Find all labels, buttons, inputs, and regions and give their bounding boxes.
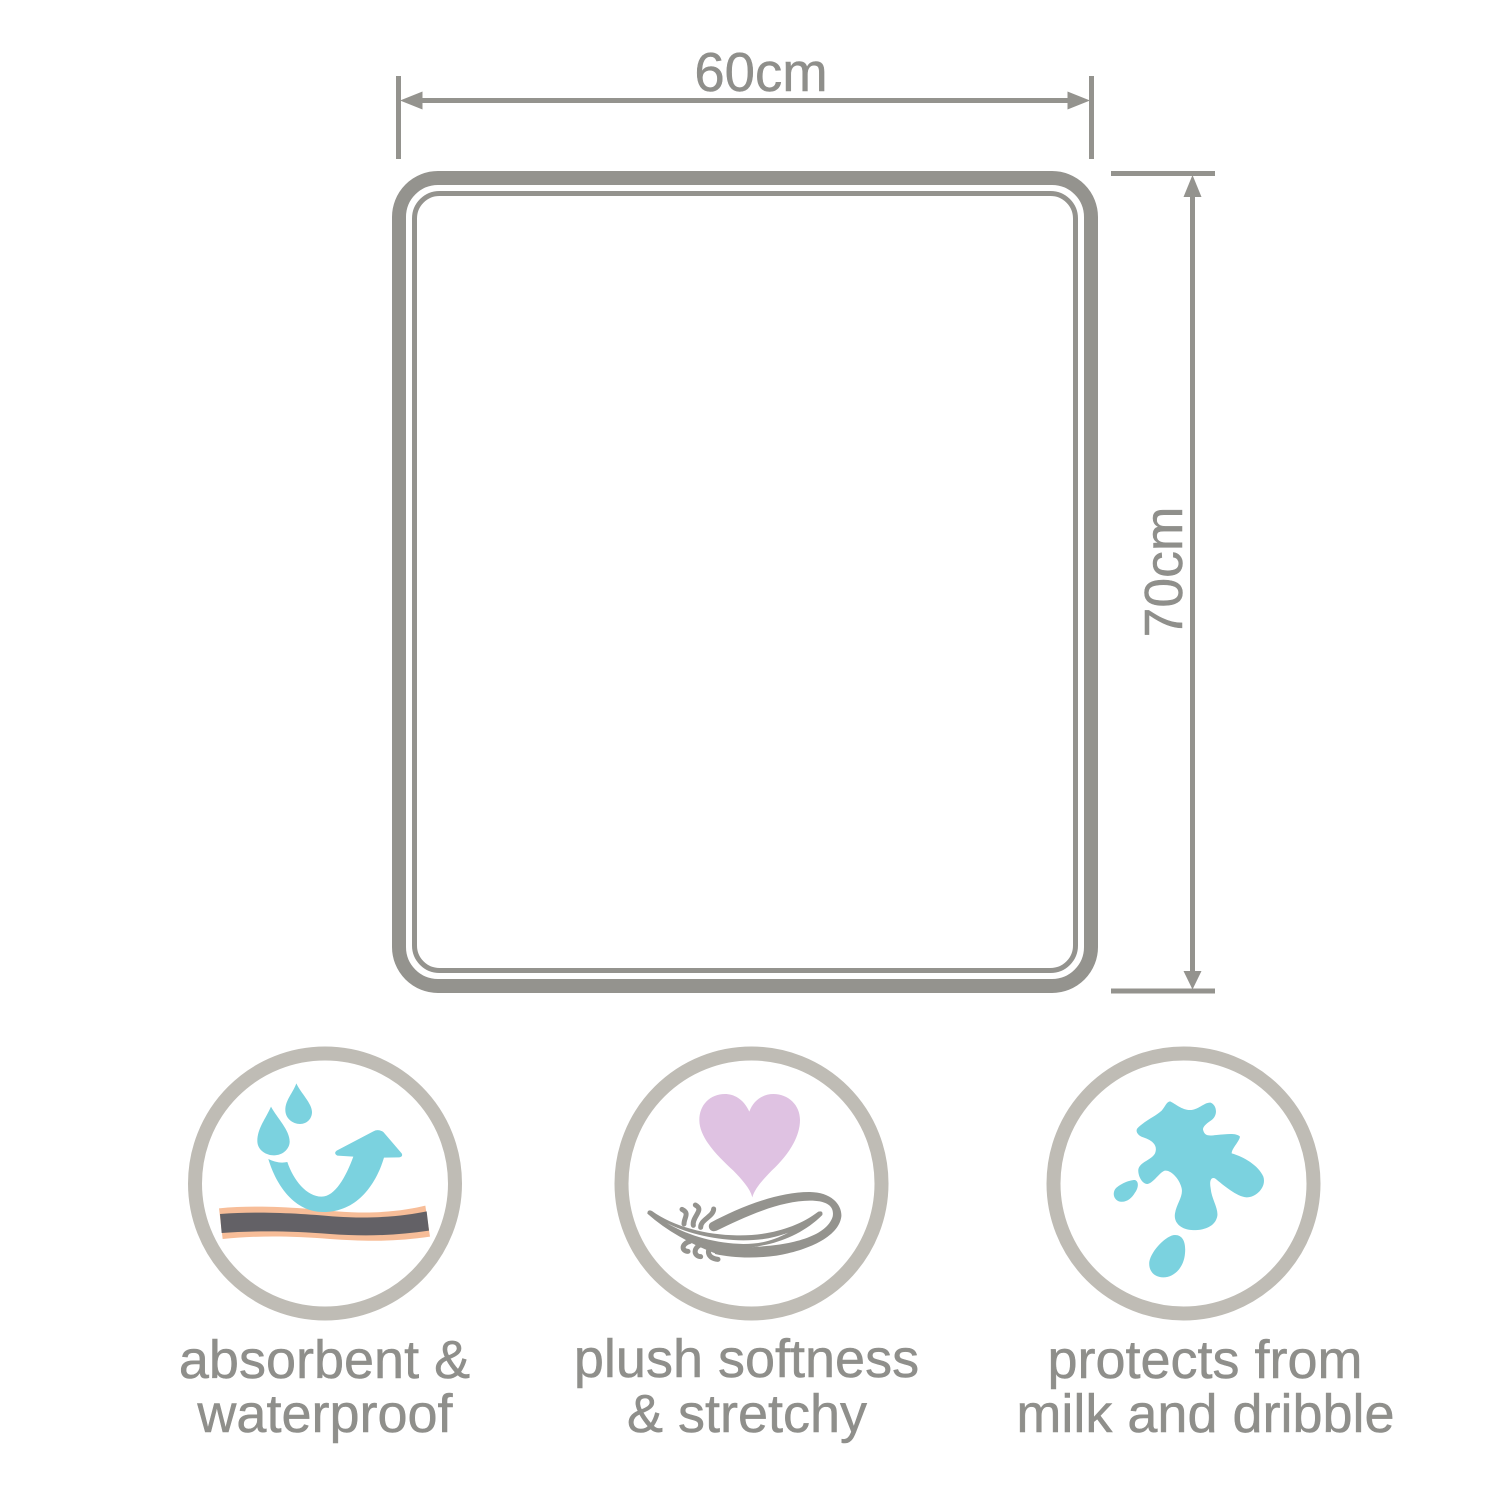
label: plush softness and stretchy: plush softness [574, 1329, 919, 1389]
icon: splash [1114, 1101, 1264, 1277]
icon ring: protection [1054, 1054, 1314, 1314]
label: plush softness and stretchy: & stretchy [627, 1384, 867, 1444]
feature: plush softness and stretchy [574, 1054, 919, 1444]
width dimension: 60cm: 60cm [694, 42, 828, 103]
height dimension: 70cm: 70cm [1135, 507, 1194, 637]
label: protects from milk and dribble: milk and dribble [1016, 1384, 1395, 1444]
icon ring: absorbent [195, 1054, 455, 1314]
feature: absorbent and waterproof [179, 1054, 470, 1444]
feature: protects from milk and dribble [1016, 1054, 1395, 1444]
label: absorbent and waterproof: absorbent & [179, 1330, 470, 1390]
height dimension: 70cm [1111, 171, 1215, 994]
label: absorbent and waterproof: waterproof [196, 1384, 454, 1444]
icon ring: softness [622, 1054, 882, 1314]
mat outline [399, 178, 1091, 986]
width dimension: 60cm [396, 42, 1094, 159]
icon: drops, arrow and fabric layer [219, 1083, 430, 1241]
label: protects from milk and dribble: protects from [1047, 1330, 1363, 1390]
icon: heart and feather [647, 1094, 841, 1259]
